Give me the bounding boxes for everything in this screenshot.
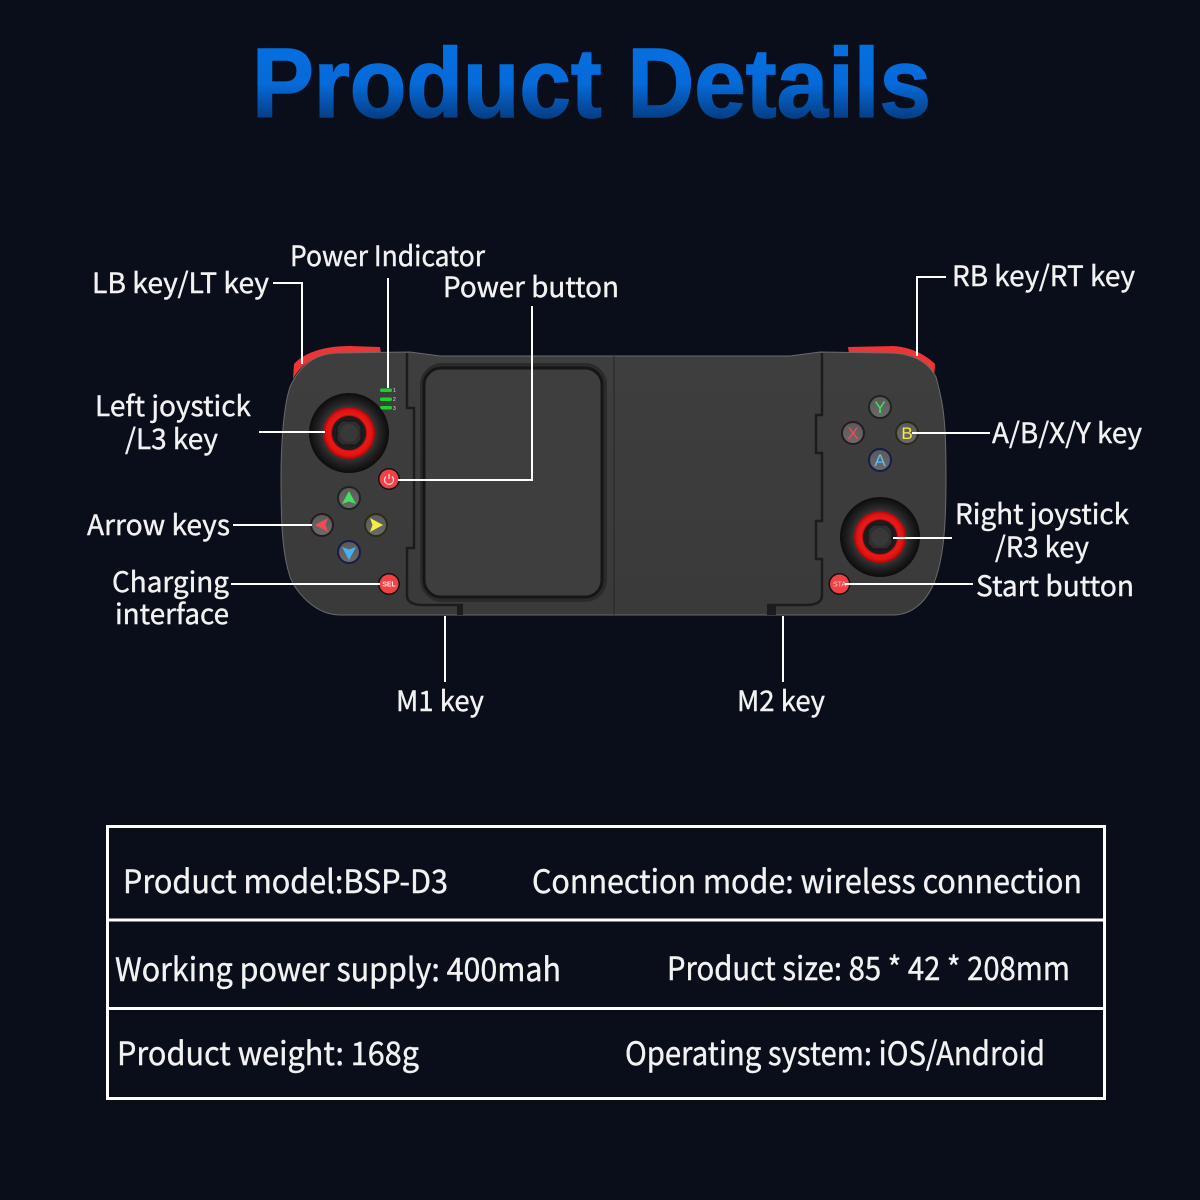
leader lines: [231, 277, 990, 682]
title: Product Details: [252, 28, 931, 138]
STA button: STA: [833, 582, 846, 588]
label: A/B/X/Y key: A/B/X/Y key: [992, 412, 1142, 452]
label: Right joystick /R3 key: [955, 493, 1130, 566]
ABXY keys: Y: [874, 398, 886, 417]
ABXY keys: X: [847, 424, 859, 443]
phone rest pad: [422, 365, 605, 600]
label: LB key/LT key: LB key/LT key: [92, 262, 269, 302]
label: RB key/RT key: RB key/RT key: [952, 255, 1135, 295]
specification table: [108, 826, 1104, 1098]
SEL button: SEL: [382, 582, 397, 588]
ABXY keys: A: [874, 451, 886, 470]
label: Left joystick /L3 key: /L3 key: [125, 418, 218, 458]
power indicator LEDs: 1: [393, 388, 396, 394]
label: Charging interface: interface: [115, 593, 229, 633]
spec: product weight: Product weight: 168g: [117, 1029, 419, 1075]
right bumper: [848, 346, 935, 378]
label: M1 key: M1 key: [396, 680, 484, 720]
label: Charging interface: [112, 561, 229, 633]
power indicator LEDs: 3: [393, 406, 396, 412]
ABXY keys: B: [901, 424, 913, 443]
arrow keys: [310, 486, 388, 564]
spec: connection mode: Connection mode: wireless connection: [532, 857, 1082, 903]
label: Right joystick /R3 key: /R3 key: [995, 526, 1089, 566]
controller body: [281, 352, 946, 615]
gamepad controller: [281, 346, 946, 615]
power button: [378, 468, 400, 490]
label: Start button: Start button: [976, 565, 1134, 605]
spec: product model: Product model:BSP-D3: [123, 857, 448, 903]
left bumper: [293, 346, 381, 379]
power indicator LEDs: [380, 388, 396, 412]
spec: product size: Product size: 85 * 42 * 208mm: [667, 944, 1070, 990]
ABXY keys: [841, 395, 919, 472]
label: Power button: Power button: [443, 266, 619, 306]
label: Left joystick /L3 key: [95, 385, 252, 458]
label: Charging interface: Charging: [112, 561, 229, 601]
label: Right joystick /R3 key: Right joystick: [955, 493, 1130, 533]
right joystick: [840, 497, 920, 577]
SEL button: [378, 573, 400, 595]
M1 and M2 notches: [457, 606, 776, 615]
sliding clamp seams: [407, 353, 822, 605]
table grid: [108, 826, 1104, 1098]
left joystick: [309, 393, 389, 473]
spec: working power supply: Working power supply: 400mah: [115, 945, 561, 991]
spec: operating system: Operating system: iOS/Android: [625, 1029, 1045, 1075]
label: Arrow keys: Arrow keys: [87, 504, 230, 544]
label: Power Indicator: Power Indicator: [290, 235, 485, 275]
power indicator LEDs: 2: [393, 397, 396, 403]
label: Left joystick /L3 key: Left joystick: [95, 385, 252, 425]
STA button: [828, 573, 850, 595]
label: M2 key: M2 key: [737, 680, 825, 720]
centre divider: [613, 356, 615, 615]
